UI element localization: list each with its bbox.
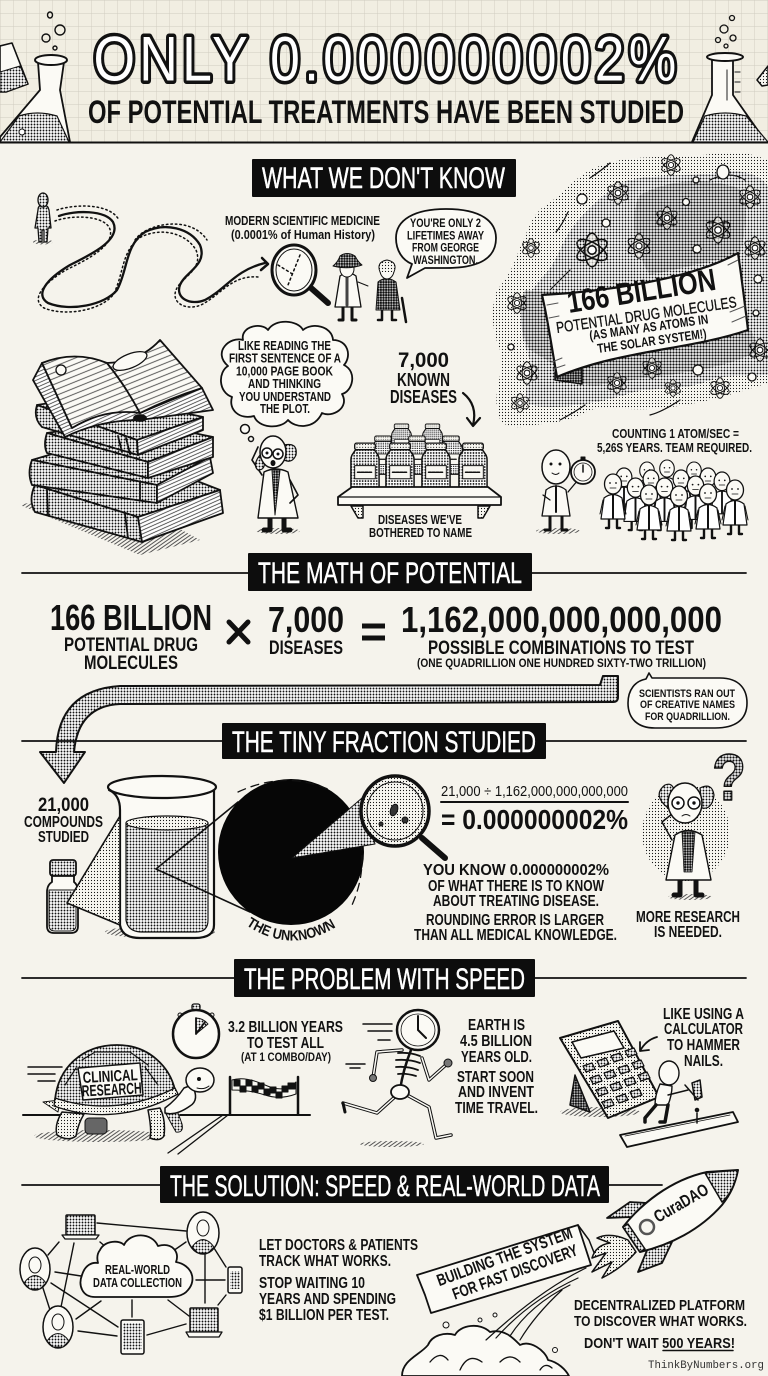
credit: ThinkByNumbers.org	[648, 1360, 764, 1372]
finish line flag	[168, 1077, 298, 1154]
heading	[22, 553, 746, 591]
stat: total combinations	[401, 599, 722, 670]
text: diseases we've bothered to name: DISEASES WE'VE	[378, 512, 462, 527]
stat: total combinations: 1,162,000,000,000,000	[401, 599, 722, 640]
text: let doctors and patients: LET DOCTORS & PATIENTS	[259, 1237, 418, 1254]
real-world data cloud	[81, 1235, 192, 1297]
icon: right flask	[692, 16, 768, 142]
speech bubble: george washington	[396, 209, 496, 278]
text: you know: ABOUT TREATING DISEASE.	[433, 893, 599, 910]
speech bubble: george washington: WASHINGTON.	[413, 253, 478, 267]
text: 7,000 known diseases: KNOWN	[397, 370, 450, 390]
text: let doctors and patients: STOP WAITING 10	[259, 1275, 365, 1292]
panel: the problem with speed	[22, 959, 746, 1154]
callout: creative names: OF CREATIVE NAMES	[640, 699, 735, 711]
icon: left flask	[0, 12, 70, 142]
text: modern scientific medicine: MODERN SCIENTIFIC MEDICINE	[225, 214, 380, 228]
rocket logo text: CuraDAO	[650, 1180, 712, 1226]
text: diseases we've bothered to name	[369, 512, 472, 540]
stat: 166 billion: MOLECULES	[84, 653, 178, 674]
scientist and george washington	[333, 254, 406, 322]
equation: = 0.000000002%	[441, 804, 628, 835]
icon: magnifier over wedge	[361, 776, 445, 858]
stat: 166 billion	[50, 597, 212, 674]
callout: creative names: FOR QUADRILLION.	[645, 711, 730, 723]
ribbon: 166 billion: THE SOLAR SYSTEM!)	[596, 326, 707, 356]
equation: 21,000 ÷ 1,162,000,000,000,000	[441, 784, 628, 800]
text: you know	[414, 862, 617, 944]
rocket exhaust lines	[486, 1268, 586, 1340]
text: 21,000 compounds studied: 21,000	[38, 795, 89, 816]
pie chart: the unknown	[218, 779, 364, 925]
zoom triangle: vial to beaker	[67, 816, 120, 925]
winding timeline arrow	[38, 206, 268, 312]
text: 3.2 billion years	[228, 1019, 343, 1064]
banner: building the system: BUILDING THE SYSTEM	[434, 1224, 575, 1290]
heading	[22, 1166, 662, 1203]
text: modern scientific medicine: (0.0001% of Human History)	[231, 228, 375, 242]
text: earth is 4.5 billion	[455, 1017, 538, 1117]
stat: 166 billion: 166 BILLION	[50, 597, 212, 638]
heading	[22, 723, 746, 759]
halftone cloud of molecules	[493, 152, 768, 427]
worried professor	[642, 783, 730, 900]
text: earth is 4.5 billion: TIME TRAVEL.	[455, 1100, 538, 1117]
text: diseases we've bothered to name: BOTHERED TO NAME	[369, 525, 472, 540]
heading: THE MATH OF POTENTIAL	[258, 557, 522, 590]
text: 7,000 known diseases	[390, 349, 457, 407]
equation	[441, 784, 628, 835]
text: you know: THAN ALL MEDICAL KNOWLEDGE.	[414, 927, 617, 944]
label: the unknown: THE UNKNOWN	[248, 916, 336, 941]
open book on top	[33, 340, 213, 437]
ribbon: 166 billion	[542, 253, 748, 384]
ribbon: 166 billion: (AS MANY AS ATOMS IN	[588, 311, 709, 343]
speech bubble: george washington: YOU'RE ONLY 2	[410, 216, 481, 230]
callout: creative names	[628, 673, 747, 728]
thought bubble: first sentence: 10,000 PAGE BOOK	[236, 364, 333, 378]
text: let doctors and patients: YEARS AND SPENDING	[259, 1291, 396, 1308]
text: decentralized platform: DON'T WAIT 500 YEARS!	[584, 1335, 735, 1352]
multiply sign	[229, 622, 248, 642]
text: like using a calculator	[663, 1006, 744, 1070]
heading	[252, 159, 516, 197]
icon: question mark: ?	[712, 740, 746, 814]
text: earth is 4.5 billion: 4.5 BILLION	[460, 1033, 532, 1050]
real-world data cloud: DATA COLLECTION	[93, 1276, 182, 1290]
text: 3.2 billion years: TO TEST ALL	[247, 1035, 324, 1052]
heading	[22, 959, 746, 997]
stat: 7,000 diseases	[268, 599, 344, 659]
thought bubble: first sentence: LIKE READING THE	[238, 338, 331, 353]
text: decentralized platform	[574, 1297, 747, 1352]
speech bubble: george washington: LIFETIMES AWAY	[407, 228, 484, 242]
icon: vial	[47, 860, 78, 933]
network device icons	[20, 1212, 242, 1354]
text: like using a calculator: NAILS.	[684, 1053, 723, 1070]
text: earth is 4.5 billion: EARTH IS	[468, 1017, 525, 1034]
label on tortoise	[81, 1067, 142, 1100]
text: modern scientific medicine	[225, 214, 380, 242]
text: counting atoms: COUNTING 1 ATOM/SEC =	[612, 427, 739, 441]
network connections	[42, 1223, 226, 1336]
text: earth is 4.5 billion: START SOON	[457, 1069, 534, 1086]
thought bubble: first sentence: AND THINKING	[248, 376, 321, 391]
text: counting atoms	[597, 427, 752, 455]
ribbon: 166 billion: 166 BILLION	[565, 262, 718, 320]
title: ONLY 0.000000002%	[94, 24, 680, 94]
panel: the solution	[20, 1166, 764, 1376]
zoom triangle: beaker to pie	[156, 802, 250, 912]
person figure	[33, 193, 53, 244]
heading: THE TINY FRACTION STUDIED	[232, 726, 536, 759]
text: like using a calculator: LIKE USING A	[663, 1006, 744, 1023]
speech bubble: george washington: FROM GEORGE	[412, 240, 479, 254]
text: 21,000 compounds studied: COMPOUNDS	[24, 814, 103, 831]
jars on a shelf	[338, 424, 501, 518]
text: 7,000 known diseases: 7,000	[398, 349, 449, 372]
text: let doctors and patients: TRACK WHAT WORKS.	[259, 1253, 391, 1270]
zoom wedge to magnifier	[292, 798, 375, 858]
heading: WHAT WE DON'T KNOW	[262, 162, 505, 195]
tortoise: clinical research	[23, 1045, 310, 1142]
big curved arrow	[40, 676, 618, 783]
running skeleton with clock head	[343, 1010, 452, 1147]
thought bubble: first sentence	[221, 322, 352, 442]
person hammering	[645, 1061, 702, 1122]
text: you know: YOU KNOW 0.000000002%	[423, 862, 609, 879]
stat: 166 billion: POTENTIAL DRUG	[64, 635, 198, 656]
text: 3.2 billion years: (AT 1 COMBO/DAY)	[241, 1050, 331, 1064]
text: you know: OF WHAT THERE IS TO KNOW	[428, 878, 605, 895]
arrow to jars	[463, 393, 480, 426]
scientist with stopwatch	[536, 450, 595, 534]
banner: building the system: FOR FAST DISCOVERY	[450, 1241, 580, 1304]
text: let doctors and patients	[259, 1237, 418, 1324]
text: 21,000 compounds studied: STUDIED	[38, 829, 89, 846]
text: like using a calculator: TO HAMMER	[667, 1037, 740, 1054]
puzzled professor	[252, 436, 300, 534]
icon: plank and nail	[620, 1108, 738, 1147]
text: let doctors and patients: $1 BILLION PER TEST.	[259, 1307, 389, 1324]
rocket: curadao	[592, 1170, 738, 1278]
text: 3.2 billion years: 3.2 BILLION YEARS	[228, 1019, 343, 1036]
panel: what we don't know	[20, 152, 768, 555]
text: earth is 4.5 billion: YEARS OLD.	[461, 1049, 532, 1066]
text: 7,000 known diseases: DISEASES	[390, 387, 457, 407]
label on tortoise: CLINICAL	[82, 1067, 138, 1087]
text: earth is 4.5 billion: AND INVENT	[458, 1084, 534, 1101]
thought bubble: first sentence: YOU UNDERSTAND	[239, 389, 331, 404]
text: 21,000 compounds studied	[24, 795, 103, 846]
label on tortoise: RESEARCH	[81, 1080, 142, 1100]
text: more research is needed	[636, 909, 740, 941]
graph paper band	[0, 0, 768, 142]
panel: header	[0, 0, 768, 142]
icon: magnifying glass	[272, 245, 328, 303]
real-world data cloud: REAL-WORLD	[105, 1263, 170, 1277]
crowd of scientists	[600, 460, 748, 540]
stat: total combinations: POSSIBLE COMBINATIONS TO TEST	[428, 638, 694, 659]
callout: creative names: SCIENTISTS RAN OUT	[639, 688, 735, 700]
stat: 7,000 diseases: 7,000	[268, 599, 344, 640]
panel: the tiny fraction studied	[21, 723, 747, 944]
thought bubble: first sentence: FIRST SENTENCE OF A	[229, 350, 341, 366]
arrow to calculator	[640, 1037, 657, 1051]
icon: calculator	[560, 1021, 659, 1118]
icon: large beaker	[105, 776, 216, 938]
launch smoke cloud	[402, 1313, 569, 1376]
thought bubble: first sentence: THE PLOT.	[260, 401, 310, 416]
stat: 7,000 diseases: DISEASES	[269, 638, 343, 659]
text: more research is needed: IS NEEDED.	[654, 924, 722, 941]
equals sign	[362, 626, 385, 638]
panel: the math of potential	[22, 553, 747, 783]
heading: THE PROBLEM WITH SPEED	[244, 963, 525, 996]
text: you know: ROUNDING ERROR IS LARGER	[426, 912, 604, 929]
icon: stack of books	[20, 340, 223, 555]
icon: stopwatch	[173, 1004, 219, 1058]
stat: total combinations: (ONE QUADRILLION ONE HUNDRED SIXTY-TWO TRILLION)	[417, 658, 706, 670]
banner: building the system	[417, 1224, 595, 1313]
